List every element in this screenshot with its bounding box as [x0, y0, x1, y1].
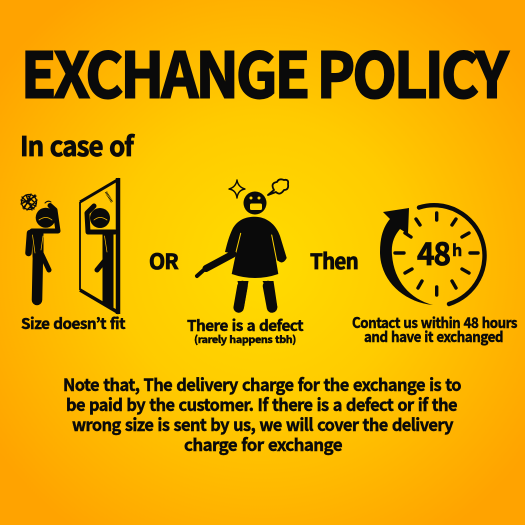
caption: rarely happens: (rarely happens tbh) [194, 331, 296, 346]
face [250, 196, 262, 210]
icon: 48h clock [380, 205, 485, 305]
legs [238, 281, 278, 308]
circular arrow [380, 208, 433, 305]
icon: angry person with rolling pin [197, 179, 288, 308]
icon: scribble cloud [21, 194, 37, 210]
arm separators [236, 233, 277, 262]
clock label: 48 [417, 229, 450, 274]
figure: reflection [87, 206, 115, 320]
note text: Note that, The delivery charge for the exchange is to [63, 371, 461, 396]
note text [63, 371, 461, 456]
subheading: in case of: In case of [20, 125, 135, 164]
clock ring [419, 205, 485, 304]
clock ticks [395, 213, 478, 295]
note text: charge for exchange [184, 431, 343, 456]
head [244, 192, 266, 214]
caption: there is a defect: There is a defect [187, 315, 304, 336]
icon: 48h clock: h [452, 237, 462, 261]
dress and arms silhouette [225, 217, 287, 278]
caption: size doesn't fit: Size doesn’t fit [21, 313, 126, 334]
icon: person at mirror [21, 178, 119, 320]
text: and have it exchanged [364, 326, 503, 347]
note text: be paid by the customer. If there is a defect or if the [66, 391, 458, 416]
icon: steam puff [268, 179, 288, 195]
connector: Then: Then [310, 246, 358, 276]
rolling pin [206, 254, 233, 268]
figure: person [28, 201, 58, 300]
mirror glint [106, 192, 112, 202]
connector: OR: OR [149, 246, 178, 276]
icon: anger burst [229, 180, 245, 198]
note text: wrong size is sent by us, we will cover the delivery [72, 411, 454, 436]
mirror frame [80, 179, 119, 202]
